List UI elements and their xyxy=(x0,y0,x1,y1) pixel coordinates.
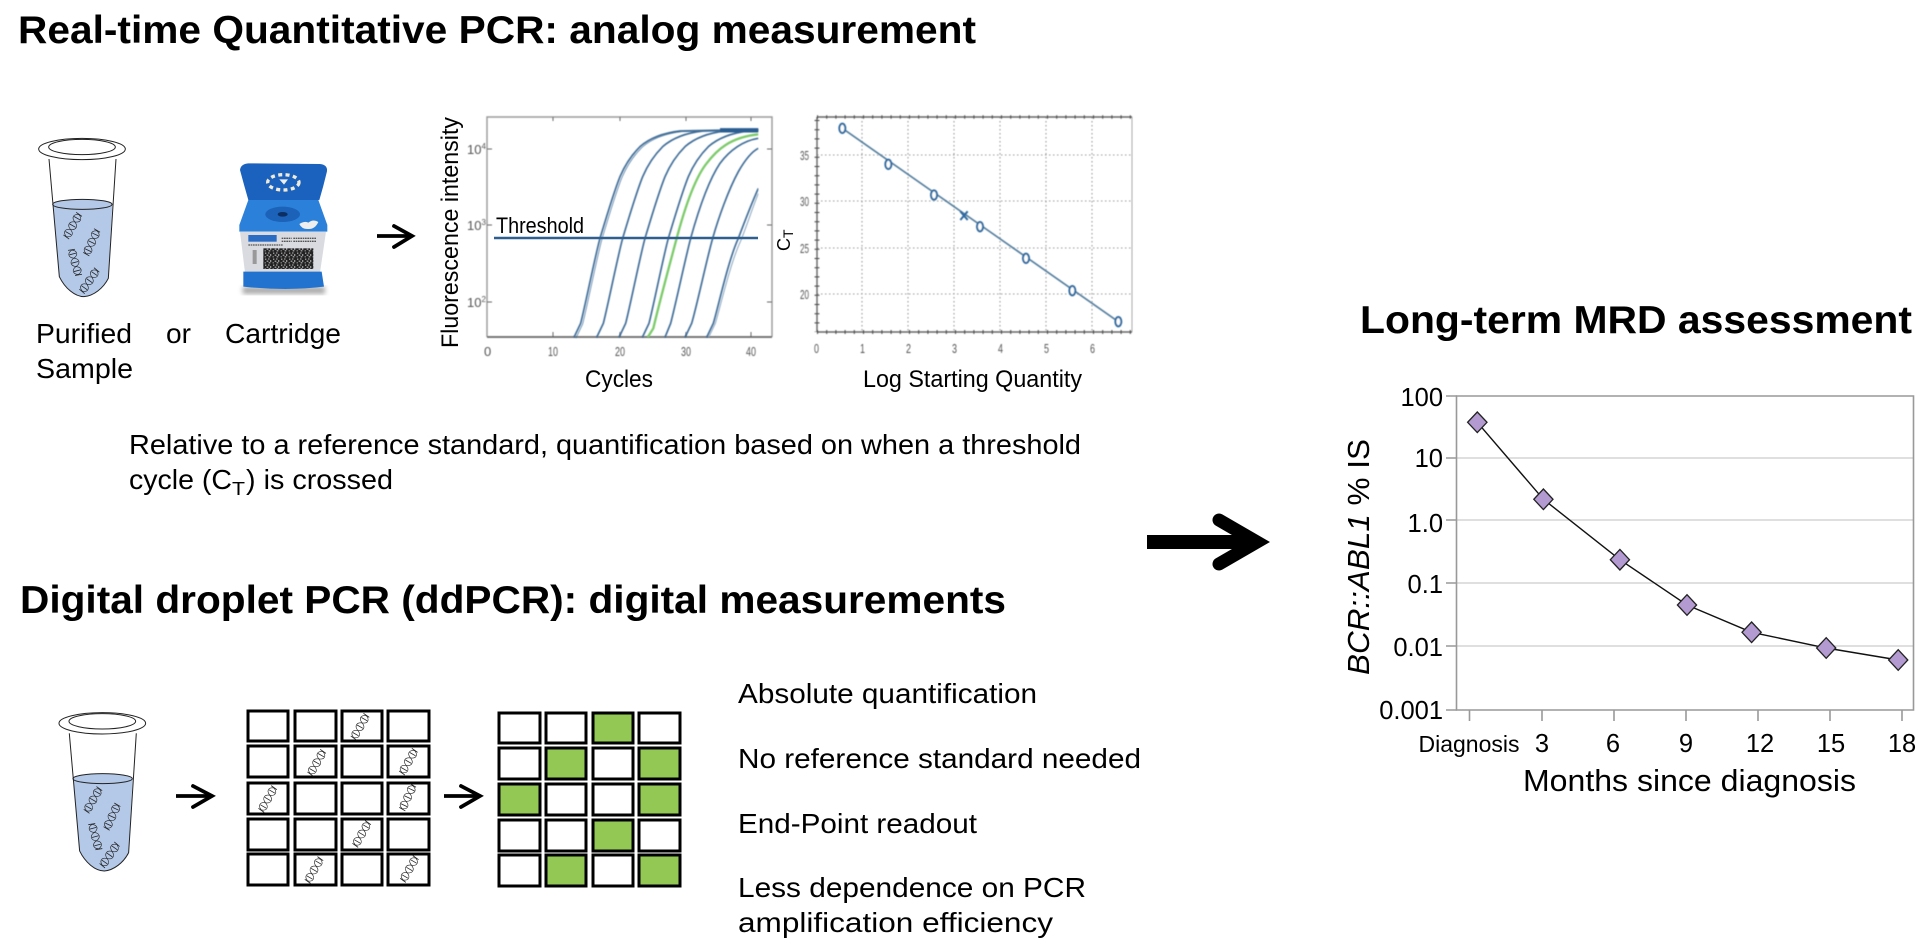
chart frame and ticks: 20 xyxy=(615,344,625,359)
y axis labels: 0.1 xyxy=(1408,571,1443,599)
x axis title: Log Starting Quantity xyxy=(863,366,1082,393)
chart: standard curve xyxy=(774,117,1132,393)
arrow: large arrow to long-term assessment xyxy=(1147,520,1257,564)
icon: sample tube with DNA xyxy=(39,138,125,297)
chart frame and ticks: 3 xyxy=(481,218,486,227)
text: quantification explanation xyxy=(129,429,1081,499)
text: ddPCR properties xyxy=(738,678,1141,938)
x axis labels: 12 xyxy=(1746,730,1774,758)
regression line and data points xyxy=(839,124,1121,326)
grid and axes: 2 xyxy=(906,341,911,356)
x axis labels: 6 xyxy=(1606,730,1620,758)
arrow: tube to droplets xyxy=(176,786,212,807)
y axis title: BCR::ABL1 % IS xyxy=(1341,439,1376,675)
chart frame and ticks: 30 xyxy=(681,344,691,359)
chart frame and ticks: 2 xyxy=(481,295,486,304)
chart: BCR::ABL1 over time xyxy=(1341,384,1916,798)
x axis labels: 15 xyxy=(1817,730,1845,758)
icon: blue test cartridge xyxy=(239,163,327,294)
x axis labels xyxy=(1418,730,1916,758)
y axis labels: 0.01 xyxy=(1393,634,1443,662)
threshold label: Threshold xyxy=(496,213,584,238)
text: ddPCR properties: End-Point readout xyxy=(738,808,977,839)
droplet grid with positive green cells xyxy=(499,713,680,886)
y axis labels: 10 xyxy=(1415,445,1443,473)
chart frame and ticks: 4 xyxy=(481,142,486,151)
x axis labels: 18 xyxy=(1888,730,1916,758)
grid and axes: 20 xyxy=(800,287,809,302)
grid and axes xyxy=(800,117,1132,356)
text: quantification explanation: ) is crossed xyxy=(246,464,393,495)
heading: digital droplet PCR: Digital droplet PCR (ddPCR): digital measurements xyxy=(20,579,1006,622)
chart: amplification plot xyxy=(440,116,774,392)
grid and axes: 3 xyxy=(952,341,957,356)
heading: long-term MRD assessment: Long-term MRD assessment xyxy=(1360,299,1912,342)
data markers xyxy=(1468,412,1908,670)
label: purified sample xyxy=(36,318,133,384)
grid and axes: 25 xyxy=(800,241,809,256)
chart frame and ticks: 10 xyxy=(548,344,558,359)
label: purified sample: Purified xyxy=(36,318,132,349)
chart frame and ticks: 10 xyxy=(467,218,481,233)
y axis labels: 100 xyxy=(1400,384,1443,412)
y axis labels xyxy=(1379,384,1443,725)
label: or: or xyxy=(166,318,191,349)
x axis labels: 9 xyxy=(1679,730,1693,758)
label: cartridge: Cartridge xyxy=(225,318,341,349)
text: quantification explanation: T xyxy=(232,479,245,499)
chart frame and ticks: 0 xyxy=(484,344,491,359)
y axis title: CT xyxy=(774,229,796,251)
grid and axes: 6 xyxy=(1090,341,1095,356)
grid and axes: 1 xyxy=(860,341,865,356)
chart frame and ticks xyxy=(467,117,772,359)
grid and axes: 4 xyxy=(998,341,1003,356)
grid lines xyxy=(1457,458,1913,646)
label: purified sample: Sample xyxy=(36,353,133,384)
axes and ticks xyxy=(1446,396,1914,721)
y axis title: CT: C xyxy=(774,238,794,251)
text: ddPCR properties: Absolute quantification xyxy=(738,678,1037,709)
y axis title: Fluorescence intensity xyxy=(437,117,464,348)
chart frame and ticks: 10 xyxy=(467,142,481,157)
text: ddPCR properties: amplification efficiency xyxy=(738,907,1053,938)
icon: sample tube for ddPCR xyxy=(59,713,146,871)
x axis labels: Diagnosis xyxy=(1418,731,1520,757)
title: real-time quantitative PCR: Real-time Quantitative PCR: analog measurement xyxy=(18,9,976,52)
text: ddPCR properties: No reference standard needed xyxy=(738,743,1141,774)
grid and axes: 30 xyxy=(800,194,809,209)
chart frame and ticks: 10 xyxy=(467,295,481,310)
chart frame and ticks: 40 xyxy=(746,344,756,359)
x axis title: Months since diagnosis xyxy=(1523,763,1856,798)
grid and axes: 5 xyxy=(1044,341,1049,356)
y axis labels: 0.001 xyxy=(1379,697,1443,725)
droplet grid with DNA xyxy=(248,711,429,885)
y axis labels: 1.0 xyxy=(1408,510,1443,538)
text: quantification explanation: Relative to a reference standard, quantification based on when a threshold xyxy=(129,429,1081,460)
text: ddPCR properties: Less dependence on PCR xyxy=(738,872,1086,903)
x axis title: Cycles xyxy=(585,366,653,393)
arrow: sample to amplification plot xyxy=(377,226,412,247)
text: quantification explanation: cycle (C xyxy=(129,464,232,495)
grid and axes: 0 xyxy=(814,341,819,356)
data line xyxy=(1477,422,1898,660)
threshold line xyxy=(494,237,758,239)
arrow: droplets to readout xyxy=(444,786,480,807)
amplification curves xyxy=(573,127,760,339)
x axis labels: 3 xyxy=(1535,730,1549,758)
grid and axes: 35 xyxy=(800,148,809,163)
y axis title: CT: T xyxy=(780,229,796,238)
